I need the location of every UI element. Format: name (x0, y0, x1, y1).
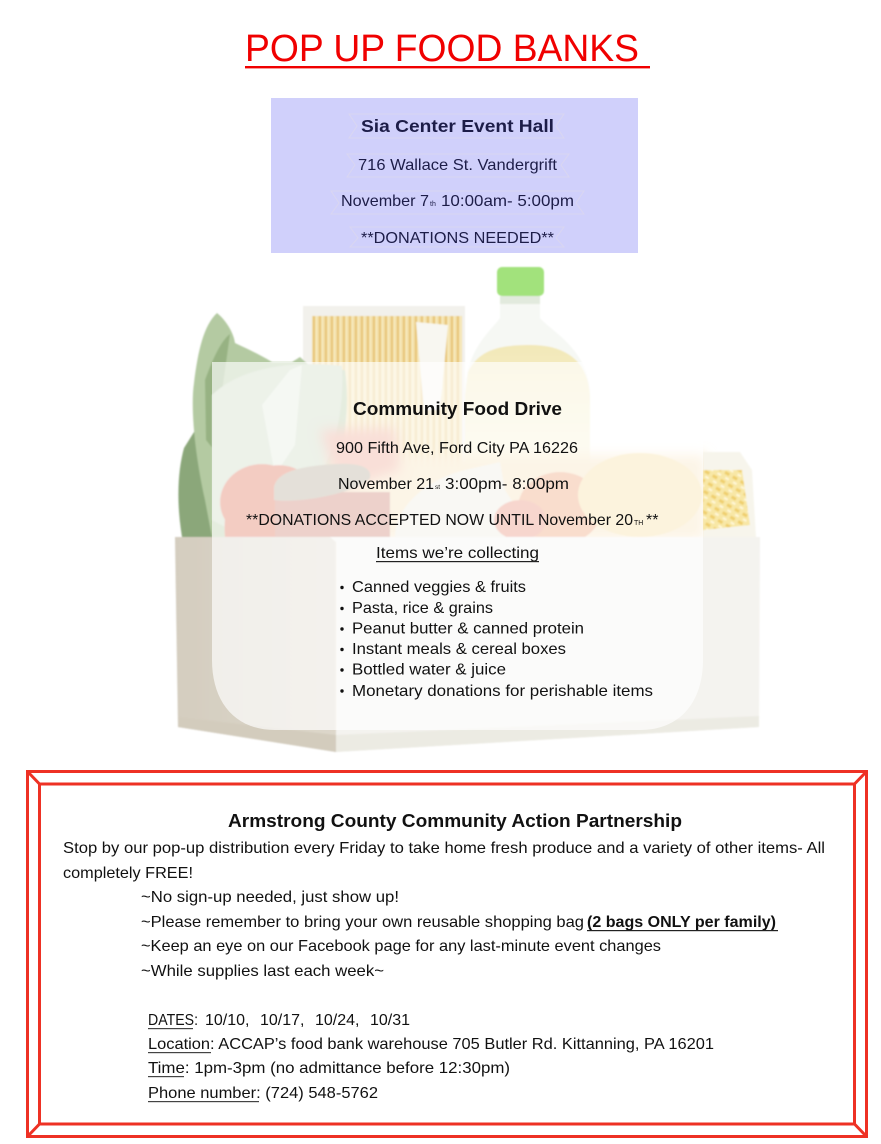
intro paragraph: completely FREE! (63, 865, 193, 882)
event date and time: November 7 (341, 193, 429, 210)
dates, location, time and phone: 10/24, (315, 1012, 359, 1029)
donations accepted note: TH (634, 520, 643, 527)
drive date and time: November 21 (338, 476, 434, 493)
donations accepted note: **DONATIONS ACCEPTED NOW UNTIL November 20 (246, 512, 633, 529)
icon: lettuce (178, 313, 347, 537)
reminders: (2 bags ONLY per family) (587, 914, 776, 931)
drive name: Community Food Drive (353, 399, 562, 419)
dates, location, time and phone: Time: 1pm-3pm (no admittance before 12:30pm) (148, 1060, 510, 1077)
panel: Armstrong County distribution (28, 772, 866, 1136)
ribbon outlines behind event text (331, 114, 584, 247)
dates, location, time and phone (148, 1012, 714, 1102)
organisation heading: Armstrong County Community Action Partnership (228, 811, 682, 831)
items heading: Items we’re collecting (376, 545, 539, 562)
panel: Sia Center event (271, 98, 638, 253)
icon: cardboard box (175, 537, 760, 752)
icon: oil bottle (465, 267, 590, 470)
event name: Sia Center Event Hall (361, 116, 554, 136)
donations accepted note: ** (646, 512, 658, 529)
list of collected items: Instant meals & cereal boxes (352, 641, 566, 658)
beveled red frame (28, 772, 866, 1136)
panel: Community Food Drive (212, 362, 703, 730)
dates, location, time and phone: 10/17, (260, 1012, 304, 1029)
event date and time: th (430, 201, 436, 208)
reminders (141, 889, 778, 980)
reminders: ~No sign-up needed, just show up! (141, 889, 399, 906)
reminders: ~Please remember to bring your own reusable shopping bag (141, 914, 584, 931)
dates, location, time and phone: 10/10, (205, 1012, 249, 1029)
list of collected items: Canned veggies & fruits (352, 579, 526, 596)
list of collected items: Bottled water & juice (352, 662, 506, 678)
drive date and time: st (435, 484, 440, 491)
dates, location, time and phone: Phone number: (724) 548-5762 (148, 1085, 378, 1102)
icon: vegetables and jars (220, 428, 756, 544)
intro paragraph: Stop by our pop-up distribution every Friday to take home fresh produce and a variety of other items- All (63, 840, 825, 857)
list of collected items: Peanut butter & canned protein (352, 620, 584, 638)
dates, location, time and phone: Location: ACCAP’s food bank warehouse 705 Butler Rd. Kittanning, PA 16201 (148, 1036, 714, 1053)
dates, location, time and phone: DATES: (148, 1012, 198, 1029)
photo: box of groceries (175, 267, 760, 752)
reminders: ~While supplies last each week~ (141, 963, 384, 980)
drive date and time (338, 476, 569, 493)
title: POP UP FOOD BANKS (245, 28, 639, 70)
intro paragraph (63, 840, 825, 882)
list of collected items: Pasta, rice & grains (352, 600, 493, 617)
event date and time (341, 193, 574, 210)
event address: 716 Wallace St. Vandergrift (358, 157, 558, 174)
list of collected items (340, 579, 653, 700)
event date and time: 10:00am- 5:00pm (441, 193, 574, 210)
icon: spaghetti pack (303, 306, 465, 476)
drive address: 900 Fifth Ave, Ford City PA 16226 (336, 440, 578, 457)
drive date and time: 3:00pm- 8:00pm (445, 476, 569, 493)
donations needed note: **DONATIONS NEEDED** (361, 230, 554, 247)
list of collected items: Monetary donations for perishable items (352, 683, 653, 700)
reminders: ~Keep an eye on our Facebook page for any last-minute event changes (141, 938, 661, 955)
dates, location, time and phone: 10/31 (370, 1012, 410, 1029)
